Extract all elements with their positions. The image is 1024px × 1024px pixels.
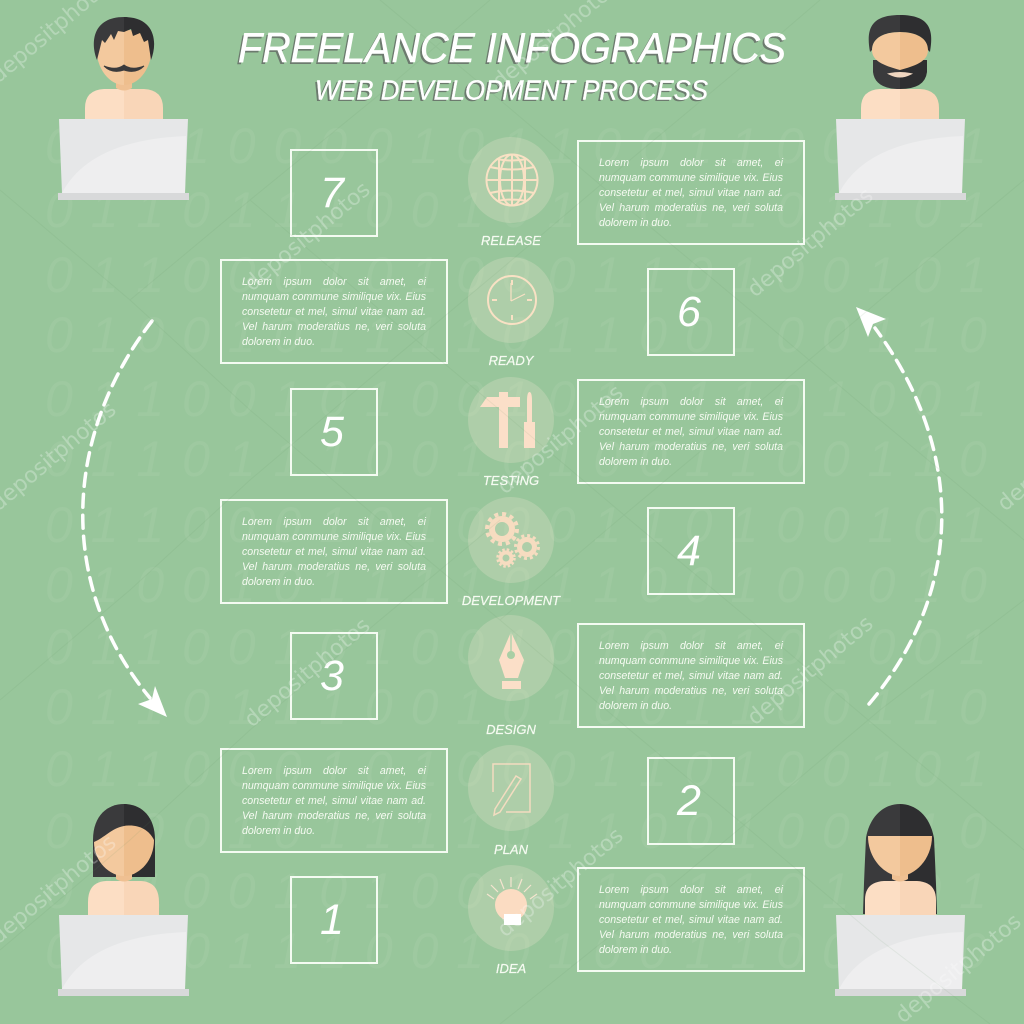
text box: ready: numquam commune similique vix. Eius xyxy=(242,291,426,303)
binary digit background: 0 1 1 0 1 1 1 0 0 1 0 1 0 0 1 1 0 0 1 1 0 xyxy=(45,679,989,735)
binary digit background: 0 1 0 0 1 0 1 1 1 1 0 1 1 0 0 1 0 0 1 1 0 xyxy=(45,307,989,363)
text box: testing: consetetur et mel, simul vitae nam ad. xyxy=(599,426,783,438)
text box: plan: consetetur et mel, simul vitae nam ad. xyxy=(242,795,426,807)
stage labels: TESTING xyxy=(483,473,539,488)
number box 3: 3 xyxy=(320,652,344,700)
binary digit background: 0 1 1 0 0 1 0 1 0 0 1 0 1 0 1 1 0 1 0 0 1 xyxy=(45,371,989,427)
text box: ready: dolorem in duo. xyxy=(242,336,315,348)
number box 4 xyxy=(647,507,735,595)
binary digit background: 0 1 1 0 0 0 1 0 1 0 0 0 1 1 0 1 0 0 1 0 1 xyxy=(45,247,989,303)
stage labels: PLAN xyxy=(494,842,529,857)
text box: development xyxy=(220,499,448,604)
binary digit background: 0 1 1 0 0 0 1 0 1 0 0 0 1 1 0 1 0 0 1 0 1 xyxy=(45,497,989,553)
text box: plan xyxy=(220,748,448,853)
number box 7 xyxy=(290,149,378,237)
text box: release xyxy=(577,140,805,245)
text box: idea: numquam commune similique vix. Eius xyxy=(599,899,783,911)
title xyxy=(236,24,786,107)
number box 5: 5 xyxy=(320,408,344,456)
text box: testing: Vel harum moderatius ne, veri soluta xyxy=(599,441,783,453)
text box: testing: dolorem in duo. xyxy=(599,456,672,468)
binary digit background: 0 1 1 0 0 0 1 0 1 0 0 0 1 1 0 1 0 0 1 0 1 xyxy=(45,741,989,797)
watermarks: depositphotos xyxy=(743,611,878,731)
binary digit background: 0 1 0 0 1 0 1 1 1 1 0 1 1 0 0 1 0 0 0 1 0 xyxy=(45,557,989,613)
watermarks: depositphotos xyxy=(493,380,628,500)
text box: development: Lorem ipsum dolor sit amet, ei xyxy=(242,516,426,528)
binary digit background: 0 1 1 0 0 1 0 1 0 0 1 0 1 0 1 1 0 1 0 0 1 xyxy=(45,863,989,919)
number box 7: 7 xyxy=(320,169,344,217)
text box: idea xyxy=(577,867,805,972)
number box 1 xyxy=(290,876,378,964)
number box 3 xyxy=(290,632,378,720)
number box 1: 1 xyxy=(320,896,344,944)
stage labels: DESIGN xyxy=(486,722,537,737)
number box 6: 6 xyxy=(677,288,701,336)
binary digit background: 0 1 1 0 1 1 1 0 0 1 0 1 0 0 1 1 0 0 1 1 0 xyxy=(45,923,989,979)
text box: testing: numquam commune similique vix. Eius xyxy=(599,411,783,423)
text box: ready: Vel harum moderatius ne, veri soluta xyxy=(242,321,426,333)
stage labels: RELEASE xyxy=(481,233,541,248)
text box: design: numquam commune similique vix. Eius xyxy=(599,655,783,667)
stage labels: IDEA xyxy=(496,961,526,976)
binary digit background: 0 1 1 0 1 1 1 0 0 1 0 1 0 0 1 1 0 0 1 1 0 xyxy=(45,431,989,487)
text box: plan: Lorem ipsum dolor sit amet, ei xyxy=(242,765,426,777)
binary digit background: 0 1 0 0 1 0 1 1 1 1 0 1 1 0 0 1 0 0 1 1 0 xyxy=(45,803,989,859)
text box: design: Vel harum moderatius ne, veri soluta xyxy=(599,685,783,697)
title: FREELANCE INFOGRAPHICS xyxy=(238,24,786,71)
number box 2: 2 xyxy=(677,777,701,825)
text box: ready xyxy=(220,259,448,364)
text box: release: numquam commune similique vix. Eius xyxy=(599,172,783,184)
text box: development: consetetur et mel, simul vitae nam ad. xyxy=(242,546,426,558)
watermarks: depositphotos xyxy=(240,177,375,297)
text box: release: consetetur et mel, simul vitae nam ad. xyxy=(599,187,783,199)
number box 2 xyxy=(647,757,735,845)
text box: idea: Lorem ipsum dolor sit amet, ei xyxy=(599,884,783,896)
text box: plan: Vel harum moderatius ne, veri soluta xyxy=(242,810,426,822)
binary digit background: 0 1 1 0 0 1 0 1 0 0 1 0 1 0 1 1 0 1 0 0 1 xyxy=(45,619,989,675)
text box: ready: Lorem ipsum dolor sit amet, ei xyxy=(242,276,426,288)
title: FREELANCE INFOGRAPHICS xyxy=(236,26,784,73)
text box: release: Lorem ipsum dolor sit amet, ei xyxy=(599,157,783,169)
text box: development: Vel harum moderatius ne, veri soluta xyxy=(242,561,426,573)
watermarks: depositphotos xyxy=(240,613,375,733)
number box 5 xyxy=(290,388,378,476)
binary digit background: 0 1 1 0 1 1 1 0 0 1 0 1 0 0 1 1 0 1 1 0 1 xyxy=(45,182,989,238)
text box: design xyxy=(577,623,805,728)
text box: testing: Lorem ipsum dolor sit amet, ei xyxy=(599,396,783,408)
watermarks: depositphotos xyxy=(743,183,878,303)
number box 4: 4 xyxy=(677,527,701,575)
text box: release: dolorem in duo. xyxy=(599,217,672,229)
stage labels: DEVELOPMENT xyxy=(462,593,561,608)
title: WEB DEVELOPMENT PROCESS xyxy=(313,76,706,107)
text box: idea: dolorem in duo. xyxy=(599,944,672,956)
text box: plan: numquam commune similique vix. Eius xyxy=(242,780,426,792)
text box: development: dolorem in duo. xyxy=(242,576,315,588)
binary digit background: 0 1 0 1 0 0 0 0 1 0 1 1 0 0 1 1 0 0 1 0 1 xyxy=(45,118,989,174)
text box: idea: consetetur et mel, simul vitae nam ad. xyxy=(599,914,783,926)
text box: design: Lorem ipsum dolor sit amet, ei xyxy=(599,640,783,652)
text box: design: dolorem in duo. xyxy=(599,700,672,712)
text box: ready: consetetur et mel, simul vitae nam ad. xyxy=(242,306,426,318)
stage labels: READY xyxy=(489,353,535,368)
title: WEB DEVELOPMENT PROCESS xyxy=(315,74,708,106)
number box 6 xyxy=(647,268,735,356)
text box: development: numquam commune similique vix. Eius xyxy=(242,531,426,543)
text box: idea: Vel harum moderatius ne, veri soluta xyxy=(599,929,783,941)
text box: release: Vel harum moderatius ne, veri soluta xyxy=(599,202,783,214)
text box: design: consetetur et mel, simul vitae nam ad. xyxy=(599,670,783,682)
text box: testing xyxy=(577,379,805,484)
text box: plan: dolorem in duo. xyxy=(242,825,315,837)
watermarks: depositphotos xyxy=(493,823,628,943)
